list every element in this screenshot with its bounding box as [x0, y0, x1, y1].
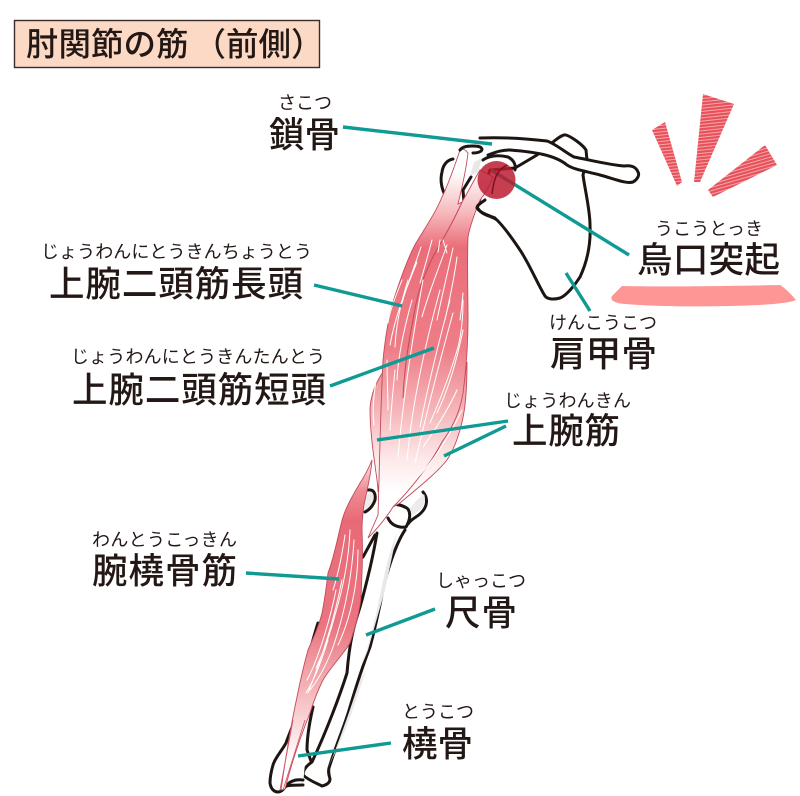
bone: radius [270, 623, 318, 792]
muscle fibres [373, 240, 463, 480]
label: biceps long head [41, 242, 312, 304]
title: 肘関節の筋（前側） [26, 26, 324, 62]
leader lines [246, 127, 590, 756]
icon: emphasis burst [652, 94, 777, 197]
label: coracoid process: うこうとっき [655, 219, 763, 239]
bone: clavicle [480, 138, 639, 182]
illustration: shoulder and arm bones [270, 135, 639, 792]
label: radius [402, 702, 474, 764]
leader line: coracoid [491, 170, 629, 255]
label: brachioradialis: わんとうこっきん [92, 530, 237, 550]
bone: humeral head outline [441, 159, 453, 197]
label: scapula: けんこうこつ [549, 313, 657, 333]
bone: distal humerus [364, 489, 375, 511]
highlight: coracoid process marker [478, 161, 516, 199]
muscle: biceps and brachialis [281, 149, 493, 790]
label: ulna: 尺骨 [445, 593, 517, 633]
label: radius: とうこつ [402, 702, 474, 722]
bone: scapula [477, 135, 590, 299]
label: biceps short head [71, 347, 326, 410]
label: brachialis [504, 391, 631, 451]
bone: acromion cap over tendons [460, 146, 482, 153]
label: clavicle [269, 93, 340, 155]
bone: radius neck [363, 535, 375, 557]
label: coracoid process [637, 219, 780, 280]
label: clavicle: さこつ [278, 93, 332, 113]
muscle: brachioradialis [281, 460, 372, 790]
label: biceps long head: じょうわんにとうきんちょうとう [41, 242, 312, 262]
highlight underline [611, 285, 796, 306]
tendon of brachioradialis at wrist [280, 720, 305, 790]
label: biceps long head: 上腕二頭筋長頭 [49, 264, 303, 304]
label: scapula: 肩甲骨 [550, 334, 657, 374]
bone: lower glenoid outline [477, 200, 495, 218]
brachioradialis fibres [306, 530, 358, 693]
label: scapula [549, 313, 657, 374]
label: radius: 橈骨 [402, 724, 473, 764]
bone: ulna [303, 530, 405, 786]
label: biceps short head: じょうわんにとうきんたんとう [71, 347, 325, 367]
muscle: brachialis outer left [370, 372, 383, 492]
label: coracoid process: 烏口突起 [637, 240, 780, 280]
label: ulna: しゃっこつ [436, 571, 526, 591]
muscle: division between biceps heads [403, 202, 462, 398]
label: brachioradialis [92, 530, 237, 591]
label: ulna [436, 571, 526, 633]
label: biceps short head: 上腕二頭筋短頭 [72, 370, 326, 410]
label: brachialis: じょうわんきん [504, 391, 631, 411]
muscle: brachialis outer right [393, 362, 467, 507]
muscle: biceps [368, 149, 493, 538]
label: clavicle: 鎖骨 [269, 115, 340, 155]
label: brachioradialis: 腕橈骨筋 [92, 551, 237, 591]
label: brachialis: 上腕筋 [512, 411, 620, 451]
